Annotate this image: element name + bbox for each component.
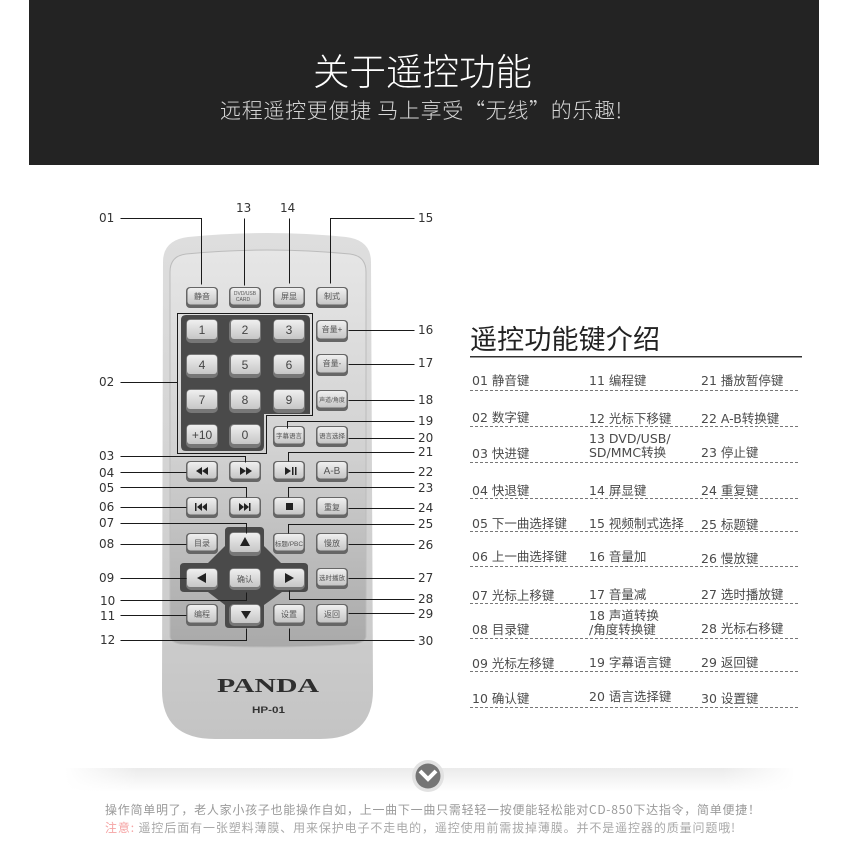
list column 2: 17 音量减	[589, 587, 647, 602]
left callout numbers: 01	[99, 211, 114, 225]
button: 3: 3	[286, 323, 293, 337]
list column 2	[589, 373, 684, 704]
button: cursor down	[229, 604, 261, 626]
list column 2: 16 音量加	[589, 549, 646, 564]
button: slow: 慢放	[324, 538, 340, 548]
left callout numbers: 02	[99, 375, 114, 389]
footer shadow band	[65, 768, 795, 792]
button: audio angle: 声道/角度	[319, 396, 345, 404]
list column 2: 19 字幕语言键	[589, 655, 672, 670]
button: menu: 目录	[194, 539, 210, 548]
button: format: 制式	[324, 291, 340, 301]
button: 6: 6	[286, 358, 293, 372]
button: audio angle	[316, 390, 348, 411]
button: mute: 静音	[194, 291, 210, 301]
list column 1: 04 快退键	[472, 483, 530, 498]
button: confirm	[229, 568, 261, 590]
top callout numbers: 13	[236, 201, 251, 215]
right callout numbers: 21	[418, 445, 433, 459]
button: previous track	[186, 497, 218, 518]
button: 9: 9	[286, 393, 293, 407]
button: return	[316, 604, 348, 626]
button: volume up: 音量+	[322, 324, 343, 334]
right callout numbers: 20	[418, 431, 433, 445]
top callout numbers: 14	[280, 201, 295, 215]
button: play pause	[273, 461, 305, 482]
left callout numbers: 03	[99, 449, 114, 463]
button: 5: 5	[242, 358, 249, 372]
button: DVD/USB CARD	[229, 287, 261, 308]
list column 1: 08 目录键	[472, 622, 530, 637]
right callout numbers: 30	[418, 634, 433, 648]
list column 3: 30 设置键	[701, 691, 759, 706]
list column 3: 23 停止键	[701, 445, 759, 460]
button: DVD/USB CARD: CARD	[236, 297, 250, 303]
number pad background	[181, 315, 310, 451]
button: title PBC: 标题/PBC	[275, 539, 303, 548]
list column 1: 03 快进键	[472, 446, 530, 461]
button: stop	[273, 497, 305, 518]
list column 2: 11 编程键	[589, 373, 647, 388]
panel: key function list	[470, 318, 802, 708]
button: 6	[273, 354, 305, 378]
button: 7: 7	[199, 393, 206, 407]
button: 0	[229, 424, 261, 448]
list column 2: SD/MMC转换	[589, 445, 667, 460]
list column 2: 20 语言选择键	[589, 689, 672, 704]
button: subtitle language	[273, 426, 305, 447]
right callout numbers: 24	[418, 501, 433, 515]
button: setup: 设置	[281, 609, 297, 619]
list column 3: 27 选时播放键	[701, 587, 784, 602]
button: A-B: A-B	[324, 466, 341, 477]
right callout numbers: 26	[418, 538, 433, 552]
left callout numbers	[99, 211, 115, 647]
right callout numbers: 29	[418, 607, 433, 621]
right callout numbers: 17	[418, 356, 433, 370]
button: 5	[229, 354, 261, 378]
right callout numbers: 28	[418, 592, 433, 606]
right callout numbers: 15	[418, 211, 433, 225]
list column 2: 13 DVD/USB/	[589, 431, 671, 446]
button: A-B	[316, 461, 348, 482]
button: volume down	[316, 354, 348, 376]
subtitle: 远程遥控更便捷 马上享受“无线”的乐趣!	[220, 95, 622, 125]
button: program: 编程	[194, 609, 210, 619]
list column 1: 02 数字键	[472, 410, 530, 425]
button: 8: 8	[242, 393, 249, 407]
list column 3: 26 慢放键	[701, 551, 759, 566]
left callout numbers: 10	[100, 594, 115, 608]
button: setup	[273, 604, 305, 626]
right callout numbers: 22	[418, 465, 433, 479]
button: timed play: 选时播放	[319, 573, 346, 582]
button: repeat: 重复	[324, 502, 340, 512]
button: fast forward	[229, 461, 261, 482]
button: volume down: 音量-	[323, 358, 342, 368]
button: return: 返回	[324, 610, 340, 619]
list column 3: 21 播放暂停键	[701, 373, 784, 388]
list column 1: 01 静音键	[472, 373, 530, 388]
button: cursor up	[229, 532, 261, 556]
button: language select: 语言选择	[319, 431, 346, 440]
button: cursor left	[186, 568, 218, 590]
button: volume up	[316, 320, 348, 342]
button: display: 屏显	[281, 292, 297, 301]
button: 7	[186, 389, 218, 413]
list column 3: 28 光标右移键	[701, 621, 784, 636]
right callout numbers: 18	[418, 393, 433, 407]
button: repeat	[316, 497, 348, 518]
left callout numbers: 04	[99, 466, 114, 480]
button: title PBC	[273, 533, 305, 554]
left callout numbers: 07	[99, 516, 114, 530]
list column 3: 29 返回键	[701, 655, 759, 670]
top callout numbers	[236, 201, 295, 215]
list column 3	[701, 373, 784, 706]
brand logo: PANDA	[217, 675, 320, 697]
button: subtitle language: 字幕语言	[276, 431, 302, 440]
left callout numbers: 05	[99, 481, 114, 495]
button: +10: +10	[192, 428, 213, 442]
list column 1: 05 下一曲选择键	[472, 516, 567, 531]
button: language select	[316, 426, 348, 447]
button: menu	[186, 533, 218, 554]
list column 2: 12 光标下移键	[589, 411, 672, 426]
button: 2: 2	[242, 323, 249, 337]
list column 3: 24 重复键	[701, 483, 759, 498]
left callout numbers: 08	[99, 537, 114, 551]
button: display	[273, 287, 305, 308]
right callout numbers: 27	[418, 571, 433, 585]
title: 关于遥控功能	[313, 42, 532, 96]
list column 2: 14 屏显键	[589, 483, 647, 498]
list column 2: /角度转换键	[589, 622, 656, 637]
button: 9	[273, 389, 305, 413]
button: next track	[229, 497, 261, 518]
button: +10	[186, 424, 218, 448]
remote body	[162, 233, 373, 739]
footer description: 操作简单明了，老人家小孩子也能操作自如，上一曲下一曲只需轻轻一按便能轻松能对CD-850下达指令，简单便捷！	[105, 801, 760, 818]
button: 0: 0	[242, 428, 249, 442]
button: timed play	[316, 568, 348, 589]
list column 1: 06 上一曲选择键	[472, 549, 567, 564]
right callout numbers	[418, 211, 433, 648]
model name: HP-01	[252, 705, 285, 715]
direction pad background	[180, 527, 308, 628]
icon: down chevron	[412, 760, 444, 792]
button: DVD/USB CARD: DVD/USB	[234, 291, 257, 297]
list column 1: 07 光标上移键	[472, 588, 555, 603]
button: cursor right	[273, 568, 305, 590]
header banner	[29, 0, 819, 165]
button: 2	[229, 319, 261, 343]
list column 2: 15 视频制式选择	[589, 516, 684, 531]
button: mute	[186, 287, 218, 308]
left callout numbers: 11	[100, 609, 115, 623]
button: 3	[273, 319, 305, 343]
list column 1: 10 确认键	[472, 691, 530, 706]
button: confirm: 确认	[237, 574, 253, 584]
list column 2: 18 声道转换	[589, 608, 659, 623]
footer notice: 注意: 遥控后面有一张塑料薄膜、用来保护电子不走电的，遥控使用前需拔掉薄膜。并不是遥控器的质量问题哦!	[105, 819, 735, 836]
list column 3: 22 A-B转换键	[701, 411, 780, 426]
remote control	[162, 233, 373, 739]
leader lines	[120, 218, 414, 640]
button: 1: 1	[199, 323, 206, 337]
right callout numbers: 16	[418, 323, 433, 337]
list column 3: 25 标题键	[701, 517, 759, 532]
right callout numbers: 25	[418, 517, 433, 531]
button: 1	[186, 319, 218, 343]
button: program	[186, 604, 218, 626]
list column 1: 09 光标左移键	[472, 656, 555, 671]
right callout numbers: 23	[418, 481, 433, 495]
list column 1	[472, 373, 567, 706]
button: slow	[316, 533, 348, 554]
left callout numbers: 09	[99, 571, 114, 585]
right callout numbers: 19	[418, 414, 433, 428]
list heading: 遥控功能键介绍	[470, 318, 660, 357]
button: 4: 4	[199, 358, 206, 372]
button: 4	[186, 354, 218, 378]
remote button panel	[170, 250, 366, 647]
left callout numbers: 06	[99, 500, 114, 514]
button: rewind	[186, 461, 218, 482]
left callout numbers: 12	[100, 633, 115, 647]
button: 8	[229, 389, 261, 413]
button: format	[316, 287, 348, 308]
